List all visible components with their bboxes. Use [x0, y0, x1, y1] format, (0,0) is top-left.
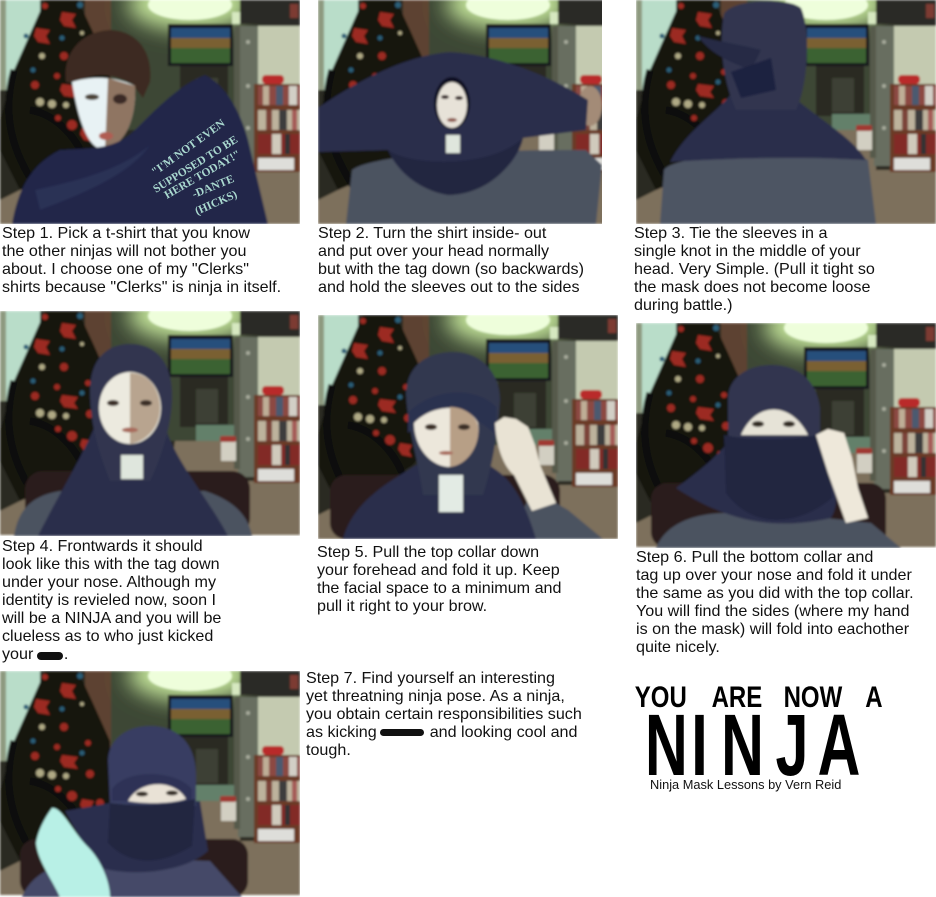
top collar fold: [408, 393, 496, 435]
text: step 6: You will find the sides (where my hand: [636, 602, 909, 620]
shirt: [12, 75, 268, 224]
text: step 1: about. I choose one of my "Clerks": [2, 260, 249, 278]
grey sweater: [508, 490, 603, 539]
hand and arm: [495, 417, 556, 511]
chair: [330, 475, 560, 539]
face opening: [434, 77, 470, 129]
sweater: [22, 857, 242, 897]
hood: [728, 365, 820, 438]
shirt print text: -DANTE: [191, 173, 236, 201]
panel: step 2 photo: [318, 0, 602, 224]
panel: step 6 photo: [636, 323, 936, 548]
shirt print text: (HICKS): [193, 189, 239, 218]
chair: [651, 483, 886, 548]
sweater: [656, 513, 901, 548]
text: step 7: yet threatning ninja pose. As a ninja,: [306, 687, 565, 705]
grey sweater: [14, 491, 252, 536]
text: step 1: the other ninjas will not bother you: [2, 242, 246, 260]
chair: [20, 839, 248, 897]
shirt print text: [150, 117, 243, 218]
text: step 5: Step 5. Pull the top collar down: [317, 543, 539, 561]
text: step 5: the facial space to a minimum and: [317, 579, 561, 597]
panel: step 4 photo: [0, 311, 300, 536]
text: step 7: you obtain certain responsibilities such: [306, 705, 582, 723]
closing title: [635, 679, 883, 790]
text: step 4: look like this with the tag down: [2, 555, 220, 573]
hair: [66, 30, 150, 98]
hand: [816, 429, 868, 523]
title: you are now a: YOU: [635, 679, 687, 714]
text: step 5: pull it right to your brow.: [317, 597, 487, 615]
face: [72, 78, 135, 150]
hood: [90, 344, 172, 481]
text: step 3: [634, 224, 875, 314]
text: step 1: Step 1. Pick a t-shirt that you know: [2, 224, 250, 242]
cape: [38, 426, 228, 536]
text: step 6: tag up over your nose and fold it under: [636, 566, 912, 584]
title: you are now a: NOW: [784, 679, 843, 714]
grey sweater: [346, 150, 602, 224]
text: step 6: [636, 548, 914, 656]
panel: step 7 photo: [0, 671, 300, 897]
tag: [446, 135, 460, 153]
text: step 1: shirts because "Clerks" is ninja in itself.: [2, 278, 281, 296]
text: step 4: [2, 537, 221, 663]
text: step 3: single knot in the middle of your: [634, 242, 861, 260]
text: step 6: the same as you did with the top collar.: [636, 584, 914, 602]
hood: [406, 352, 500, 495]
cape: [670, 90, 866, 162]
shirt print text: "I'M NOT EVEN: [150, 117, 228, 178]
text: step 6: Step 6. Pull the bottom collar and: [636, 548, 873, 566]
text: step 3: head. Very Simple. (Pull it tight so: [634, 260, 875, 278]
lower mask: [108, 799, 195, 861]
eye slit: [741, 410, 808, 435]
text: step 4: Step 4. Frontwards it should: [2, 537, 203, 555]
text: step 5: [317, 543, 561, 615]
text: step 4: under your nose. Although my: [2, 573, 216, 591]
text: step 4: your .: [2, 645, 68, 663]
cape: [343, 465, 536, 539]
text: step 4: will be a NINJA and you will be: [2, 609, 221, 627]
credit line: Ninja Mask Lessons by Vern Reid: [650, 777, 841, 792]
cape: [676, 423, 836, 524]
face: [414, 408, 478, 467]
scarf: [65, 801, 208, 872]
text: step 6: quite nicely.: [636, 638, 720, 656]
panel: step 5 photo: [318, 315, 618, 539]
text: step 7: Step 7. Find yourself an interesting: [306, 669, 555, 687]
text: step 3: the mask does not become loose: [634, 278, 870, 296]
text: step 2: Step 2. Turn the shirt inside- out: [318, 224, 546, 242]
text: step 6: is on the mask) will fold into eachother: [636, 620, 909, 638]
hood: [108, 726, 196, 806]
raised hand: [36, 808, 110, 897]
chair: [25, 471, 250, 536]
text: step 3: Step 3. Tie the sleeves in a: [634, 224, 827, 242]
title: you are now a: A: [865, 679, 883, 714]
text: step 7: [306, 669, 582, 759]
hood with knot: [722, 1, 807, 110]
text: step 4: identity is revieled now, soon I: [2, 591, 216, 609]
text: step 7: tough.: [306, 741, 351, 759]
shirt print text: HERE TODAY!": [162, 148, 243, 202]
shirt stretched by the sleeves: [318, 52, 588, 195]
text: step 3: during battle.): [634, 296, 733, 314]
panel: step 1 photo: [0, 0, 300, 224]
hand: [578, 86, 602, 126]
eye slit: [128, 784, 186, 803]
shirt print text: SUPPOSED TO BE: [151, 134, 240, 196]
censor mark: step 7: [380, 729, 424, 736]
title: you are now a: ARE: [712, 679, 762, 714]
tag: [439, 475, 463, 512]
lower mask: [724, 433, 832, 520]
text: step 1: [2, 224, 281, 296]
sweater back: [660, 153, 876, 224]
face: [99, 372, 161, 444]
text: step 2: [318, 224, 584, 296]
censor mark: step 4: [37, 652, 63, 660]
tag: [121, 455, 143, 479]
text: step 4: clueless as to who just kicked: [2, 627, 213, 645]
panel: step 3 photo: [636, 0, 936, 224]
text: step 2: and hold the sleeves out to the sides: [318, 278, 580, 296]
text: step 2: and put over your head normally: [318, 242, 549, 260]
text: step 2: but with the tag down (so backwards): [318, 260, 584, 278]
text: step 7: as kicking and looking cool and: [306, 723, 577, 741]
text: step 5: your forehead and fold it up. Keep: [317, 561, 560, 579]
